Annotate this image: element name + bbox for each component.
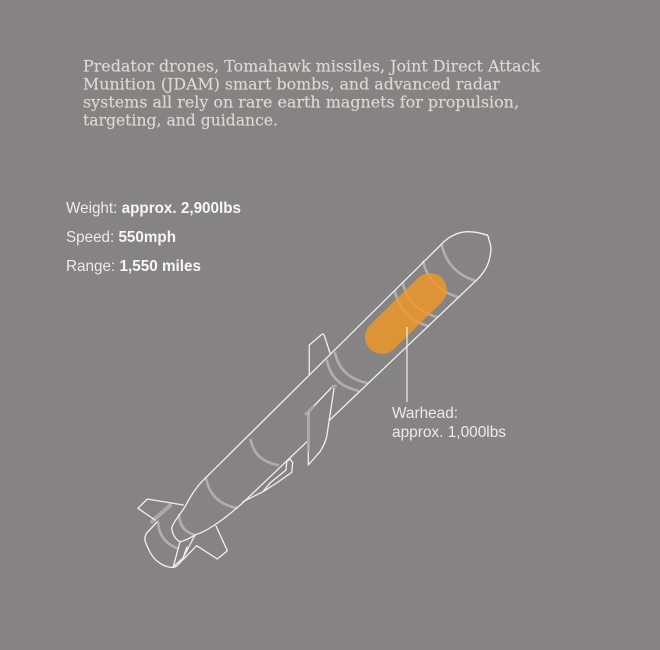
body and nose bbox=[172, 232, 491, 542]
body bands bbox=[158, 245, 475, 548]
tail grey strut bbox=[152, 506, 170, 522]
warhead leader line bbox=[406, 327, 408, 402]
missile specifications: Range: 1,550 miles bbox=[66, 258, 201, 275]
warhead highlight bbox=[382, 290, 430, 337]
left tail fin bbox=[138, 499, 183, 520]
missile illustration bbox=[138, 232, 491, 567]
wing grey edge bbox=[306, 386, 336, 450]
missile specifications: Weight: approx. 2,900lbs bbox=[66, 200, 241, 217]
warhead label: approx. 1,000lbs bbox=[392, 424, 506, 441]
intro text block: Munition (JDAM) smart bombs, and advanced radar bbox=[83, 76, 501, 94]
main wing bbox=[308, 386, 334, 465]
missile specifications bbox=[66, 200, 241, 275]
nozzle bbox=[173, 535, 195, 567]
intro text block: targeting, and guidance. bbox=[83, 112, 278, 130]
missile specifications: Speed: 550mph bbox=[66, 229, 176, 246]
upper fin bbox=[309, 334, 330, 375]
missile outline bbox=[138, 232, 491, 567]
intro text block: systems all rely on rare earth magnets for propulsion, bbox=[83, 94, 519, 112]
intro text block: Predator drones, Tomahawk missiles, Joint Direct Attack bbox=[83, 58, 541, 76]
intro text block bbox=[83, 58, 541, 130]
warhead label bbox=[392, 405, 506, 441]
rear tail and exhaust bbox=[145, 522, 227, 567]
small under-wing bbox=[243, 459, 293, 502]
warhead label: Warhead: bbox=[392, 405, 458, 422]
